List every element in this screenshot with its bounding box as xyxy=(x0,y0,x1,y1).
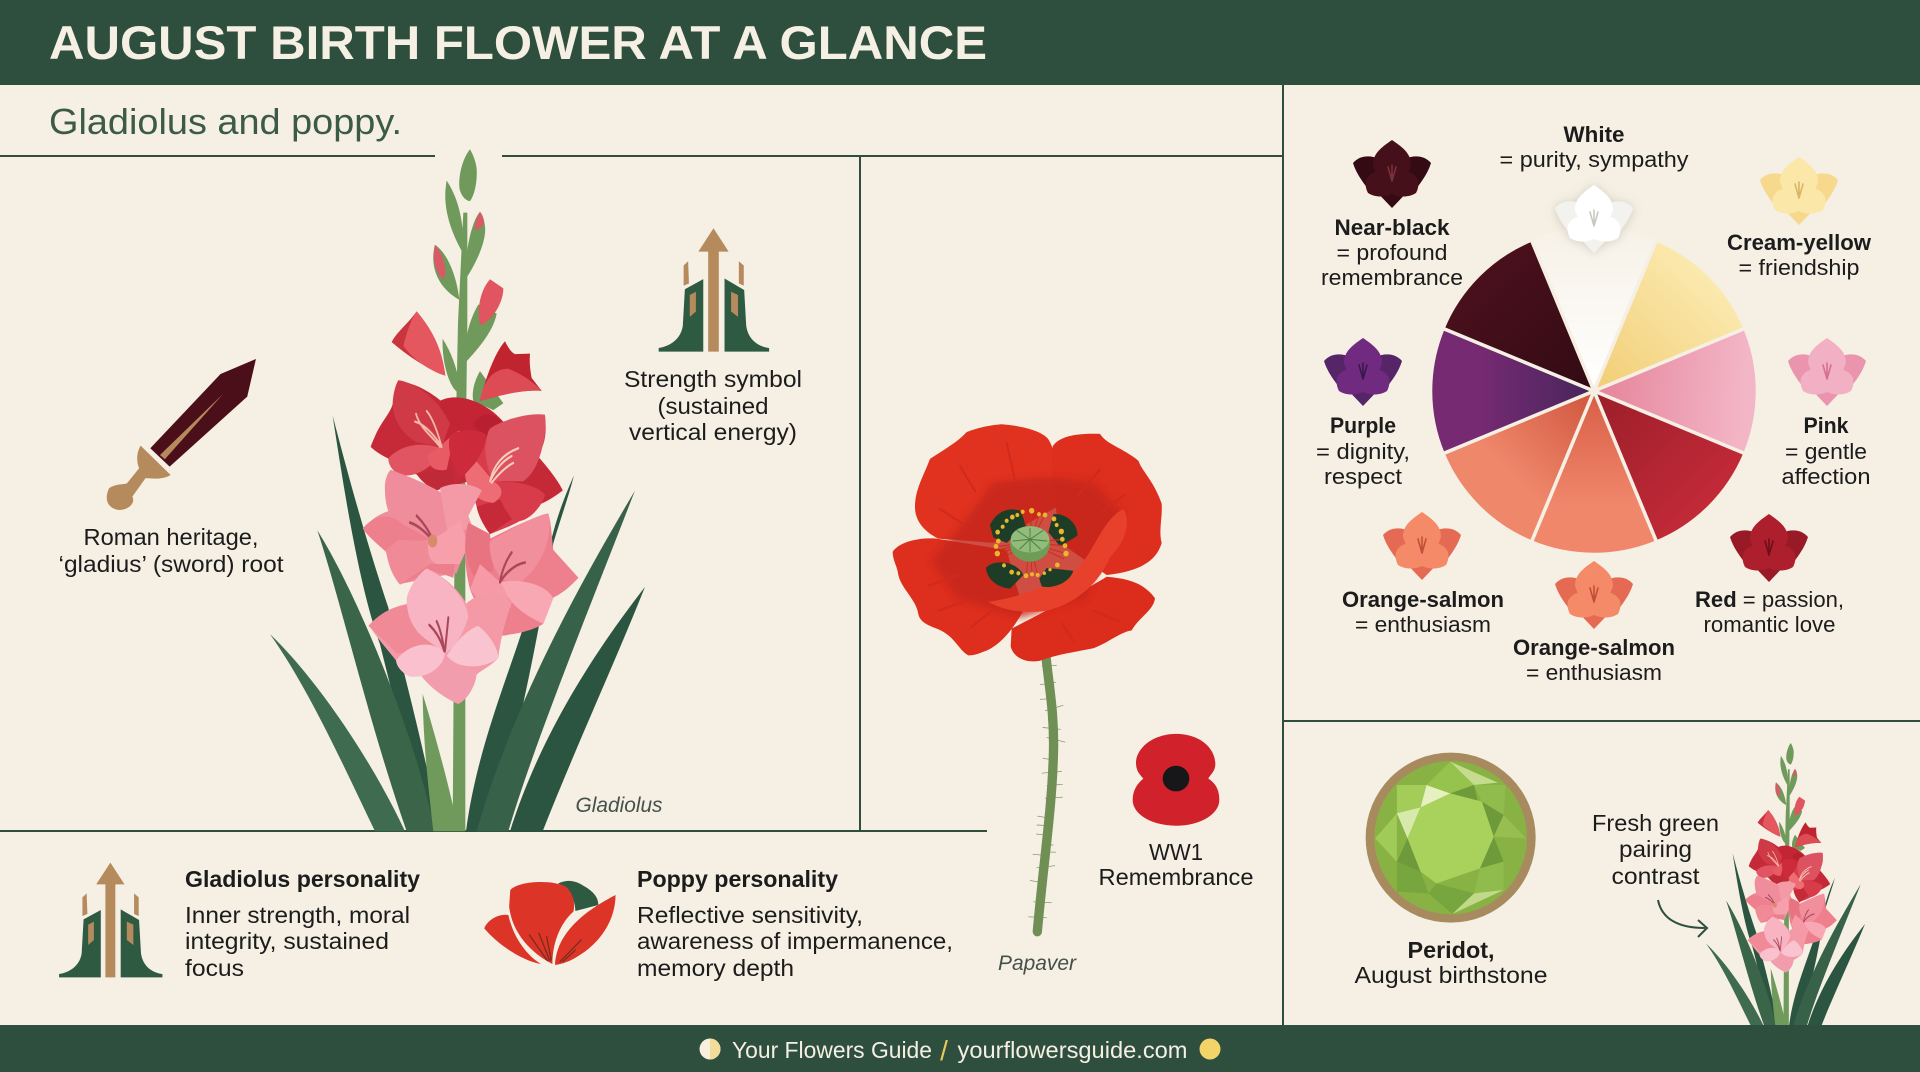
label: red: romantic love xyxy=(1704,612,1836,637)
label: near-black: Near-black xyxy=(1334,215,1450,240)
label: pink xyxy=(1782,413,1870,489)
text: poppy personality xyxy=(637,866,953,981)
icon: footer flower dot xyxy=(700,1038,720,1060)
footer url: yourflowersguide.com xyxy=(958,1037,1188,1063)
icon: remembrance poppy xyxy=(1133,734,1219,826)
footer slash: / xyxy=(940,1035,948,1066)
caption: fresh green pairing: pairing xyxy=(1619,836,1692,862)
title: AUGUST BIRTH FLOWER AT A GLANCE xyxy=(49,16,987,69)
icon: poppy personality xyxy=(484,881,616,965)
caption: strength symbol: (sustained xyxy=(658,393,768,419)
poppy stem xyxy=(1028,656,1065,931)
arrow: to small gladiolus xyxy=(1658,900,1707,937)
label: cream-yellow: = friendship xyxy=(1738,255,1860,280)
text: gladiolus personality: Inner strength, moral xyxy=(185,902,410,928)
caption: fresh green pairing xyxy=(1592,810,1719,889)
gladiolus illustration xyxy=(270,149,645,831)
subtitle: Gladiolus and poppy. xyxy=(49,101,402,142)
label: near-black: = profound xyxy=(1336,240,1448,265)
caption: strength symbol: Strength symbol xyxy=(624,366,802,392)
icon: gladius sword xyxy=(107,359,256,510)
label: orange-salmon bottom xyxy=(1513,635,1675,685)
caption: strength symbol: vertical energy) xyxy=(629,419,797,445)
label: near-black: remembrance xyxy=(1321,265,1463,290)
icon: purple bloom xyxy=(1324,338,1402,406)
icon: pink bloom xyxy=(1788,338,1866,406)
caption: fresh green pairing: contrast xyxy=(1612,863,1700,889)
label: orange-salmon bottom: Orange-salmon xyxy=(1513,635,1675,660)
icon: white bloom xyxy=(1555,185,1633,253)
icon: cream bloom xyxy=(1760,157,1838,225)
caption: WW1 remembrance: Remembrance xyxy=(1098,864,1254,890)
text: gladiolus personality: Gladiolus personality xyxy=(185,866,420,892)
text: poppy personality: Reflective sensitivity, xyxy=(637,902,863,928)
label: purple: = dignity, xyxy=(1316,439,1410,464)
icon: peridot gemstone xyxy=(1366,753,1536,923)
label: white: = purity, sympathy xyxy=(1500,147,1689,172)
caption: strength symbol xyxy=(624,366,802,445)
text: gladiolus personality: focus xyxy=(185,955,244,981)
label: white xyxy=(1500,122,1689,172)
caption: peridot: August birthstone xyxy=(1354,962,1548,988)
caption: WW1 remembrance: WW1 xyxy=(1149,839,1203,865)
caption: Roman heritage: Roman heritage, xyxy=(84,524,258,550)
gladiolus label: Gladiolus xyxy=(576,794,663,817)
label: purple: Purple xyxy=(1330,413,1396,438)
text: poppy personality: memory depth xyxy=(637,955,794,981)
label: orange-salmon left: Orange-salmon xyxy=(1342,587,1504,612)
poppy centre xyxy=(986,508,1077,589)
label: orange-salmon left xyxy=(1342,587,1504,637)
chart: colour meaning wheel xyxy=(1431,228,1757,554)
label: pink: = gentle xyxy=(1785,439,1867,464)
label: near-black xyxy=(1321,215,1463,290)
header band xyxy=(0,0,1920,85)
icon: near-black bloom xyxy=(1353,140,1431,208)
caption: Roman heritage xyxy=(58,524,284,577)
caption: fresh green pairing: Fresh green xyxy=(1592,810,1719,836)
caption: peridot: Peridot, xyxy=(1408,937,1494,963)
label: red xyxy=(1695,587,1844,637)
label: purple xyxy=(1316,413,1410,489)
label: pink: Pink xyxy=(1804,413,1849,438)
label: cream-yellow: Cream-yellow xyxy=(1727,230,1871,255)
text: gladiolus personality xyxy=(185,866,420,981)
papaver label: Papaver xyxy=(998,952,1077,975)
label: orange-salmon bottom: = enthusiasm xyxy=(1526,660,1662,685)
text: poppy personality: Poppy personality xyxy=(637,866,838,892)
label: white: White xyxy=(1564,122,1624,147)
text: gladiolus personality: integrity, sustained xyxy=(185,928,389,954)
icon: red bloom xyxy=(1730,514,1808,582)
text: poppy personality: awareness of impermanence, xyxy=(637,928,953,954)
label: purple: respect xyxy=(1324,464,1403,489)
label: pink: affection xyxy=(1782,464,1870,489)
small gladiolus illustration xyxy=(1706,743,1865,1025)
panel: colour wheel xyxy=(1316,122,1871,685)
caption: WW1 remembrance xyxy=(1098,839,1254,890)
icon: strength arrow xyxy=(659,228,769,352)
label: cream-yellow xyxy=(1727,230,1871,280)
icon: orange-salmon bloom bottom xyxy=(1555,561,1633,629)
icon: orange-salmon bloom left xyxy=(1383,512,1461,580)
icon: footer yellow dot xyxy=(1200,1038,1220,1060)
footer band xyxy=(0,1025,1920,1072)
label: orange-salmon left: = enthusiasm xyxy=(1355,612,1491,637)
caption: peridot xyxy=(1354,937,1548,988)
icon: gladiolus personality xyxy=(59,863,162,977)
caption: Roman heritage: ‘gladius’ (sword) root xyxy=(58,551,284,577)
footer brand text: Your Flowers Guide xyxy=(732,1037,932,1063)
poppy illustration xyxy=(893,424,1162,931)
label: red: Red = passion, xyxy=(1695,587,1844,612)
poppy petals xyxy=(893,424,1162,661)
